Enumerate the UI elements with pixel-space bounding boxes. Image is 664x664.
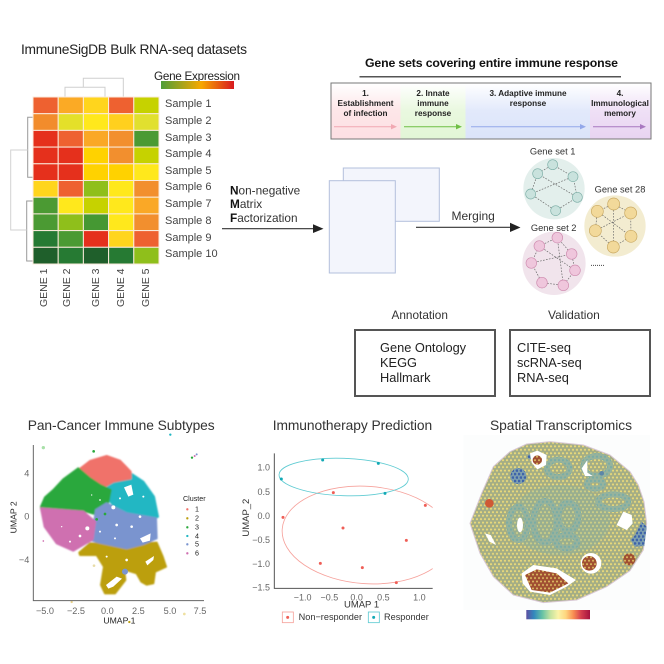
tick labels: 7.5 (194, 606, 206, 616)
heatmap (33, 97, 159, 264)
responder points (280, 458, 386, 495)
axis labels: UMAP 1 (344, 600, 379, 611)
white lumens (485, 451, 633, 595)
panel: validation datasets (510, 330, 650, 396)
tick labels: −4 (19, 555, 29, 565)
gene set 28: Gene set 28 (595, 184, 645, 194)
sample labels: Sample 6 (165, 181, 211, 193)
tick labels: −1.0 (252, 559, 270, 569)
cluster 6 (41, 508, 95, 551)
axis labels: UMAP 2 (9, 501, 19, 533)
teal tissue rings (509, 456, 628, 548)
stage 2: 2. Innate (416, 89, 450, 98)
tick labels: 4 (24, 469, 29, 479)
sample labels: Sample 9 (165, 232, 211, 244)
gene labels: GENE 1 (38, 268, 50, 307)
text: non-negative matrix factorization: Matrix (230, 197, 262, 211)
gene set 2 (522, 223, 586, 295)
tick labels: 2.5 (132, 606, 145, 616)
axes (274, 453, 433, 588)
tissue section (470, 442, 647, 603)
axis labels (241, 499, 379, 611)
blue and red hotspots (485, 454, 647, 547)
stage 3: 3. Adaptive immune (489, 89, 567, 98)
gene labels: GENE 4 (115, 268, 127, 307)
stage 4: memory (604, 109, 636, 118)
cluster legend: 6 (195, 550, 199, 558)
ellipses (278, 458, 433, 584)
gene set 28 (584, 184, 646, 257)
title: pan-cancer immune subtypes: Pan-Cancer Immune Subtypes (28, 418, 215, 433)
label: merging: Merging (452, 209, 495, 223)
stage 3: response (510, 99, 547, 108)
label: validation: Validation (548, 308, 600, 322)
stage 1 (334, 89, 397, 129)
panel: annotation databases: Hallmark (380, 370, 431, 385)
legend: Responder (384, 612, 429, 622)
tick labels: −0.5 (320, 592, 338, 602)
stage 2: immune (417, 99, 449, 108)
title: spatial transcriptomics: Spatial Transcriptomics (490, 418, 632, 433)
heading underline (360, 76, 621, 78)
panel: validation datasets: CITE-seq (517, 340, 571, 355)
tick labels: 0.0 (350, 592, 363, 602)
gene labels: GENE 5 (140, 268, 152, 307)
stage 2 (404, 89, 462, 129)
sample labels: Sample 8 (165, 215, 211, 227)
text: non-negative matrix factorization: Factorization (230, 211, 298, 225)
non-responder points (281, 491, 427, 584)
diffuse teal region (510, 485, 610, 555)
cluster legend: 3 (195, 524, 199, 532)
sample labels: Sample 4 (165, 148, 211, 160)
tick labels: 0.5 (377, 592, 390, 602)
tick labels: −1.0 (294, 592, 312, 602)
panel: annotation databases: KEGG (380, 355, 417, 370)
cluster legend: 2 (195, 515, 199, 523)
panel: annotation databases: Gene Ontology (380, 340, 467, 355)
axis labels: UMAP 1 (103, 615, 136, 625)
arrow: merging to gene sets (416, 223, 520, 232)
legend: Non−responder (299, 612, 362, 622)
heading: gene sets covering entire immune response: Gene sets covering entire immune response (365, 56, 618, 70)
sample labels: Sample 2 (165, 115, 211, 127)
matrices (329, 168, 439, 273)
sample labels: Sample 7 (165, 198, 211, 210)
sample labels: Sample 3 (165, 132, 211, 144)
cluster 3 (41, 468, 111, 514)
gene labels: GENE 3 (90, 268, 102, 307)
tick labels: 1.0 (413, 592, 426, 602)
legend: gene expression colour bar: Gene Expression (154, 70, 240, 83)
text: non-negative matrix factorization (230, 184, 301, 225)
stage 4: 4. (617, 89, 623, 98)
tick labels: −0.5 (252, 535, 270, 545)
brown lumen contents (525, 455, 635, 593)
panel: validation datasets: scRNA-seq (517, 355, 582, 370)
stage 4: Immunological (591, 99, 649, 108)
tick labels: 0.0 (257, 511, 270, 521)
panel: immune response stages (331, 83, 651, 139)
column dendrogram (65, 78, 123, 97)
arrow: NMF to matrices (222, 224, 324, 233)
cluster legend: 1 (195, 506, 199, 514)
tick labels: 5.0 (164, 606, 176, 616)
ellipsis (591, 264, 604, 267)
cluster 2 (79, 543, 166, 593)
sample labels: Sample 5 (165, 165, 211, 177)
legend: gene expression colour bar (154, 70, 240, 89)
tick labels: −5.0 (36, 606, 54, 616)
legend (282, 612, 429, 623)
gene set networks (522, 146, 646, 295)
tick labels: 0.5 (257, 487, 270, 497)
title: immunotherapy prediction: Immunotherapy Prediction (273, 418, 432, 433)
cluster legend (183, 495, 206, 558)
sample labels: Sample 1 (165, 98, 211, 110)
specks (42, 433, 198, 623)
colour bar (526, 610, 590, 619)
axis labels (9, 501, 136, 625)
chart: immunotherapy ellipse plot (242, 453, 433, 624)
gene labels: GENE 2 (61, 268, 73, 307)
gaps in clusters (61, 485, 154, 589)
chart: UMAP clusters (9, 433, 206, 625)
axes (33, 445, 204, 601)
row dendrogram (11, 117, 33, 261)
stage 1: of infection (343, 109, 388, 118)
axis labels: UMAP_2 (241, 499, 252, 537)
tick labels: −1.5 (252, 583, 270, 593)
panel: annotation databases (355, 330, 495, 396)
chart: spatial tissue map (463, 435, 650, 610)
sample labels (165, 98, 218, 260)
title: ImmuneSigDB datasets: ImmuneSigDB Bulk RNA-seq datasets (21, 42, 247, 57)
cluster legend: 4 (195, 532, 199, 540)
cluster blobs (41, 456, 166, 593)
stage 2: response (415, 109, 452, 118)
sample labels: Sample 10 (165, 248, 218, 260)
gene set 1 (523, 146, 585, 219)
cluster 4 (106, 474, 158, 522)
gene labels (38, 268, 152, 307)
label: annotation: Annotation (392, 308, 448, 322)
tick labels (19, 469, 206, 616)
cluster legend: 5 (195, 541, 199, 549)
stage 1: 1. (362, 89, 369, 98)
gene set 1: Gene set 1 (530, 146, 575, 156)
panel: validation datasets: RNA-seq (517, 370, 569, 385)
tick labels: 1.0 (257, 463, 270, 473)
stage 3 (471, 89, 586, 129)
cluster 1 (79, 456, 131, 487)
tick labels (252, 463, 426, 602)
cluster 5 (91, 503, 157, 548)
tick labels: 0.0 (101, 606, 114, 616)
gene set 2: Gene set 2 (531, 223, 576, 233)
text: non-negative matrix factorization: Non-negative (230, 184, 301, 198)
tick labels: −2.5 (67, 606, 85, 616)
cluster legend: Cluster (183, 495, 206, 503)
stage 1: Establishment (338, 99, 394, 108)
tick labels: 0 (24, 512, 29, 522)
stage 4 (591, 89, 649, 129)
